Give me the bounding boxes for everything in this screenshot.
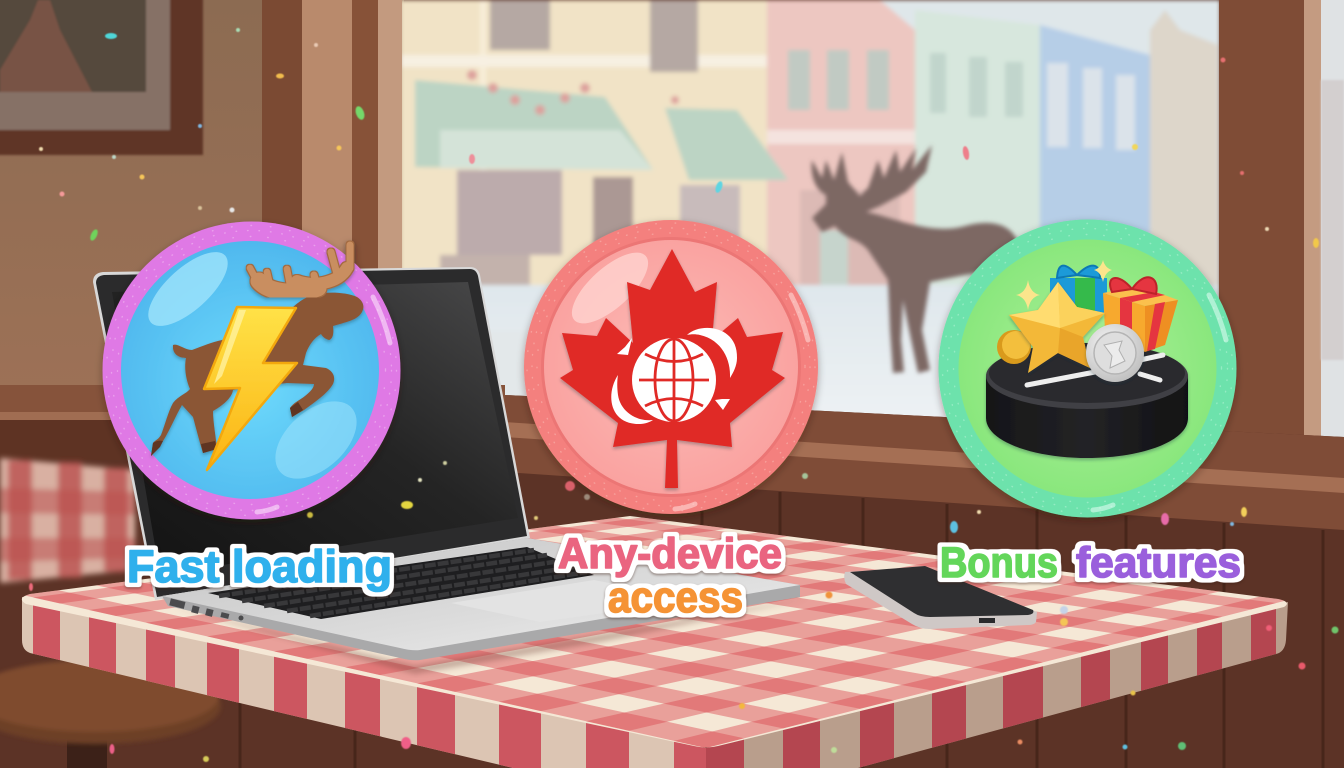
icon: hockey puck: [986, 343, 1188, 458]
window frame right post: [1219, 0, 1344, 460]
badge: bonus features: [938, 220, 1236, 518]
window view: snowy street: [400, 0, 1220, 450]
icon: lightning bolt: [204, 307, 297, 470]
icon: blue gift: [1050, 266, 1107, 314]
label: Bonus features: features: [1076, 539, 1241, 587]
moose silhouette outside: [812, 145, 1017, 373]
background: cafe wall: [0, 0, 404, 400]
lower wall wood panels: [0, 385, 1344, 768]
label: Bonus features: [940, 539, 1241, 587]
icon: maple leaf: [560, 249, 785, 488]
icon: running moose: [151, 245, 363, 456]
table drop: left side stripes: [0, 590, 720, 768]
label: Any-device access: [558, 530, 782, 622]
label: Fast loading: Fast loading: [127, 541, 392, 592]
icon: gold coin: [997, 330, 1031, 364]
badge: any-device access: [524, 220, 818, 514]
badge: fast loading: [102, 222, 400, 520]
framed picture: [0, 0, 203, 155]
icon: silver coin: [1086, 324, 1144, 382]
label: Bonus features: Bonus: [940, 539, 1058, 587]
background table with blurred gingham: [0, 458, 135, 583]
icon: red and orange gift: [1103, 277, 1178, 352]
phone: [844, 566, 1037, 629]
tablecloth top gingham: [22, 516, 1287, 748]
label: Any-device access: access: [608, 573, 743, 622]
icon: gold star: [1009, 282, 1105, 373]
laptop: [93, 267, 810, 674]
highlights: blue glass: [137, 240, 371, 494]
stool: [0, 660, 221, 768]
icon: globe with arrows: [611, 328, 737, 424]
table drop: right side stripes: [700, 590, 1300, 768]
label: Any-device access: Any-device: [558, 530, 782, 578]
highlight: glass: [561, 241, 659, 335]
window frame left post: [262, 0, 402, 400]
icon: sparkles: [1016, 260, 1112, 310]
